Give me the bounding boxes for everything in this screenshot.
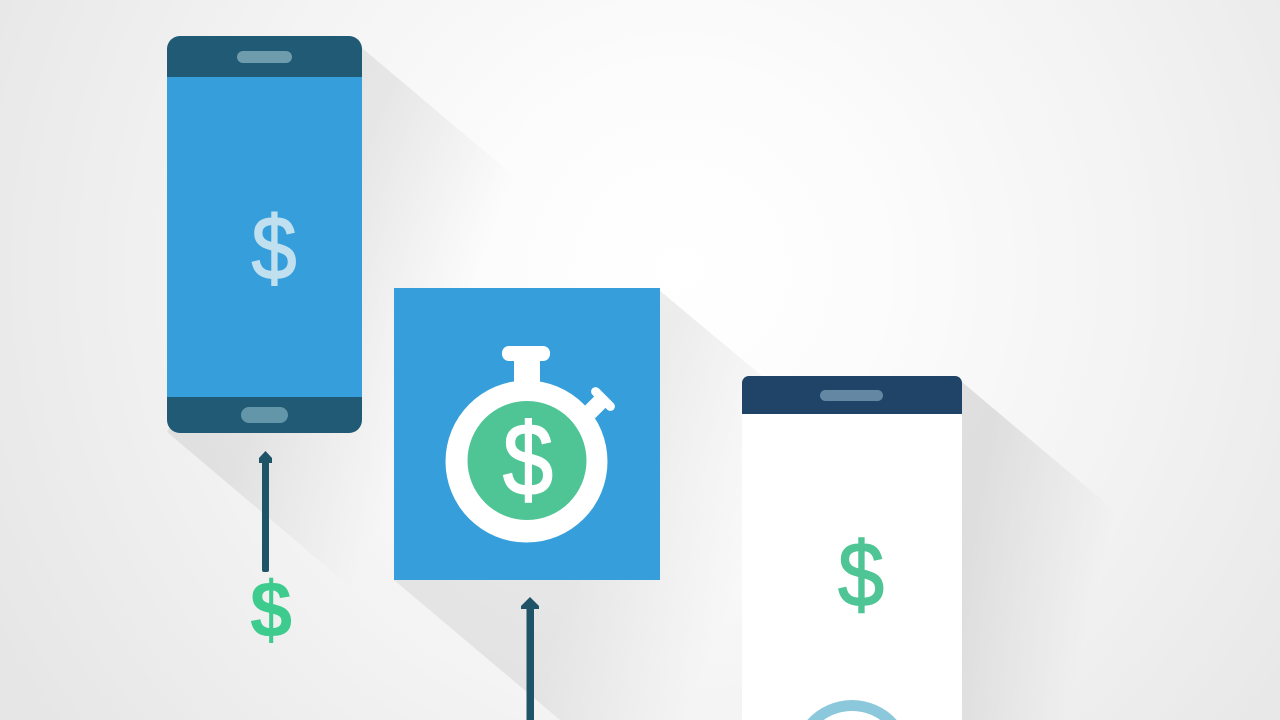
phone home button <box>241 407 288 423</box>
phone speaker <box>237 51 292 63</box>
icon: partial ring <box>807 700 897 720</box>
panel background <box>394 288 660 580</box>
arrow: to timer panel <box>521 597 539 720</box>
white phone device <box>742 376 962 720</box>
white phone header <box>742 376 962 414</box>
icon: stopwatch: $ <box>503 404 553 517</box>
phone screen <box>167 77 362 397</box>
icon: stopwatch <box>446 346 617 542</box>
white phone speaker <box>820 390 883 401</box>
white phone body <box>742 414 962 720</box>
phone body <box>167 36 362 433</box>
icon: dollar on phone: $ <box>251 198 297 299</box>
long shadow: phone <box>167 48 720 720</box>
panel: timer <box>394 288 660 580</box>
icon: green dollar on white phone: $ <box>838 523 884 626</box>
long shadow: white phone <box>742 382 1280 720</box>
icon: green dollar: $ <box>250 564 292 654</box>
arrow: dollar to phone <box>259 451 272 572</box>
long shadow: timer panel <box>394 290 1000 720</box>
phone device <box>167 36 362 433</box>
